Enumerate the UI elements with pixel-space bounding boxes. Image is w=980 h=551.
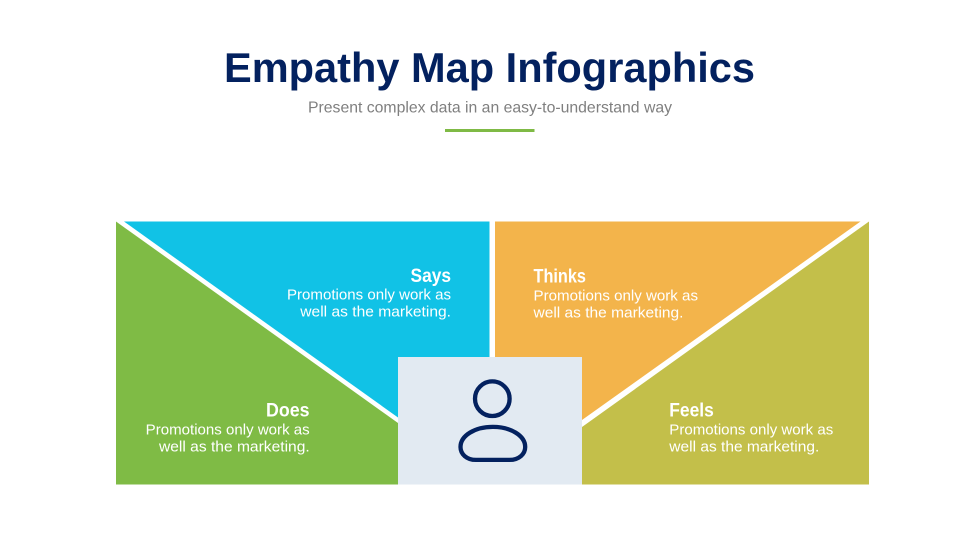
does text: well as the marketing. (158, 440, 310, 456)
does background (116, 222, 398, 484)
feels heading: Feels (669, 400, 714, 422)
says text: well as the marketing. (299, 304, 451, 320)
panel: does (116, 222, 398, 484)
thinks text: Promotions only work as (534, 288, 698, 304)
does text (146, 422, 310, 456)
title: Empathy Map Infographics (224, 44, 755, 91)
says background (124, 222, 490, 418)
panel: center person (398, 357, 582, 484)
thinks text (532, 288, 698, 322)
says heading: Says (410, 266, 451, 287)
subtitle: Present complex data in an easy-to-understand way (308, 100, 672, 116)
feels text (668, 422, 833, 456)
thinks background (495, 222, 860, 420)
panel: feels (582, 222, 869, 484)
feels text: well as the marketing. (668, 440, 819, 456)
icon: person (460, 381, 525, 460)
does heading: Does (266, 400, 310, 422)
feels background (582, 222, 869, 484)
says text (287, 288, 451, 320)
says text: Promotions only work as (287, 288, 451, 304)
thinks heading: Thinks (534, 266, 586, 288)
thinks text: well as the marketing. (532, 306, 684, 322)
feels text: Promotions only work as (669, 422, 833, 438)
center background (398, 357, 582, 484)
accent underline (445, 129, 534, 132)
panel: says (124, 222, 490, 418)
does text: Promotions only work as (146, 422, 310, 438)
panel: thinks (495, 222, 860, 420)
